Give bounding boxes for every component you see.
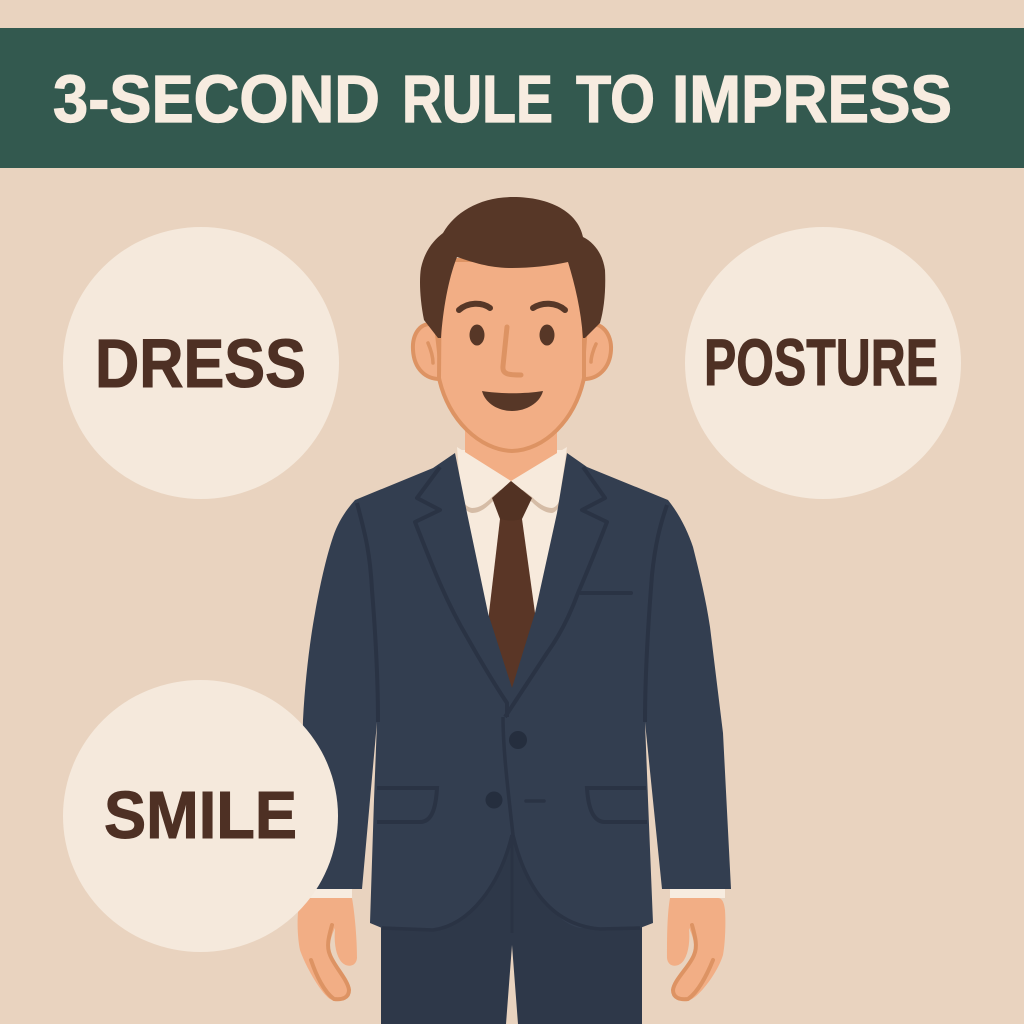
left pocket flap [377, 788, 437, 822]
circle: dress [63, 227, 339, 499]
circle: smile [63, 680, 338, 952]
hair [420, 197, 605, 338]
right sleeve seam [645, 505, 667, 722]
button lower [486, 792, 502, 808]
left eyebrow [459, 304, 490, 310]
right collar [511, 447, 567, 508]
button upper [509, 731, 527, 749]
mouth [482, 391, 543, 411]
title: TO [576, 62, 655, 137]
tie [489, 481, 535, 690]
left ear [413, 324, 442, 379]
jacket body [300, 453, 731, 930]
right pocket flap [587, 788, 647, 822]
right eyebrow [533, 304, 565, 310]
title: 3-SECOND [53, 62, 380, 137]
circle: smile: SMILE [104, 778, 297, 853]
centre trouser seam [510, 837, 514, 933]
chest pocket [581, 591, 631, 595]
trousers [381, 830, 642, 1024]
jacket [300, 453, 731, 933]
right ear [582, 324, 611, 379]
left collar [457, 447, 511, 508]
left sleeve seam [357, 503, 378, 722]
head [413, 197, 611, 451]
front edge [503, 717, 640, 929]
right cuff [670, 888, 725, 898]
title: RULE [402, 62, 553, 137]
left hand [298, 898, 357, 1000]
title banner [0, 28, 1024, 168]
neck and shirt [457, 425, 567, 640]
circle: dress: DRESS [95, 325, 306, 402]
collar shadow [461, 486, 560, 513]
nose [503, 327, 521, 375]
circle: posture [685, 227, 961, 499]
figure: man in suit [298, 197, 731, 1024]
right lapel [505, 467, 607, 717]
title: IMPRESS [672, 62, 952, 137]
left lapel [415, 467, 507, 717]
face [439, 260, 584, 451]
left eye [470, 324, 484, 346]
right hand [667, 898, 725, 1000]
left cuff [308, 888, 352, 898]
right eye [540, 324, 554, 346]
circle: posture: POSTURE [704, 325, 938, 399]
title [53, 62, 952, 137]
buttonhole [526, 799, 544, 803]
